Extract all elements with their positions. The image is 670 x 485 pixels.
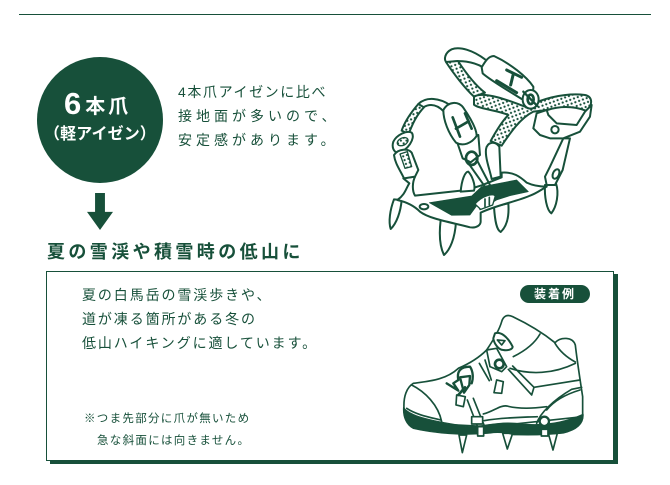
- usage text: 道が凍る箇所がある冬の: [82, 311, 257, 327]
- intro text: 4本爪アイゼンに比べ: [178, 84, 327, 100]
- base frame: [397, 173, 547, 227]
- top hardware: [479, 333, 513, 393]
- heading: 夏の雪渓や積雪時の低山に: [47, 242, 304, 262]
- strap clip front: [472, 417, 483, 424]
- left curved strap: [402, 99, 450, 134]
- dotted ankle strap: [474, 94, 591, 146]
- intro text: [178, 84, 339, 148]
- usage text: [82, 287, 318, 351]
- dark sole: [403, 407, 583, 435]
- illustration: crampon: [390, 48, 592, 255]
- note text: ※つま先部分に爪が無いため: [84, 413, 250, 425]
- ankle seam: [508, 334, 580, 395]
- centre left buckle: [443, 103, 490, 192]
- left side buckles: [393, 132, 418, 178]
- intro text: 安定感があります。: [178, 132, 339, 148]
- spikes: [459, 433, 557, 453]
- top buckle: [482, 56, 539, 109]
- usage text: 夏の白馬岳の雪渓歩きや、: [82, 287, 272, 303]
- badge: 6本爪 軽アイゼン: [37, 57, 163, 183]
- illustration: boot: [403, 315, 583, 453]
- rear clip: [540, 417, 549, 436]
- note text: [84, 412, 250, 447]
- note text: 急な斜面には向きません。: [97, 435, 250, 447]
- panel: usage: [46, 271, 614, 461]
- front hole: [420, 204, 428, 209]
- dark base plate: [429, 180, 528, 215]
- boot upper: [404, 315, 583, 427]
- lace buckle: [447, 367, 473, 407]
- strap clip rear: [478, 427, 484, 436]
- upper loop strap: [445, 48, 485, 97]
- spikes: [390, 183, 557, 255]
- toe cap: [407, 385, 442, 422]
- label: 装着例: 装着例: [534, 287, 576, 301]
- badge title: 6本爪: [64, 86, 131, 121]
- crampon strap: [467, 387, 582, 426]
- label: 装着例: [520, 285, 590, 303]
- badge subtitle: （軽アイゼン）: [44, 126, 156, 143]
- centre post: [486, 143, 501, 179]
- usage text: 低山ハイキングに適しています。: [82, 335, 318, 351]
- sole seam: [483, 406, 547, 421]
- arrow: down: [87, 193, 113, 230]
- right heel lever: [533, 105, 592, 185]
- intro text: 接地面が多いので、: [178, 108, 339, 124]
- base plate slot: [475, 195, 495, 209]
